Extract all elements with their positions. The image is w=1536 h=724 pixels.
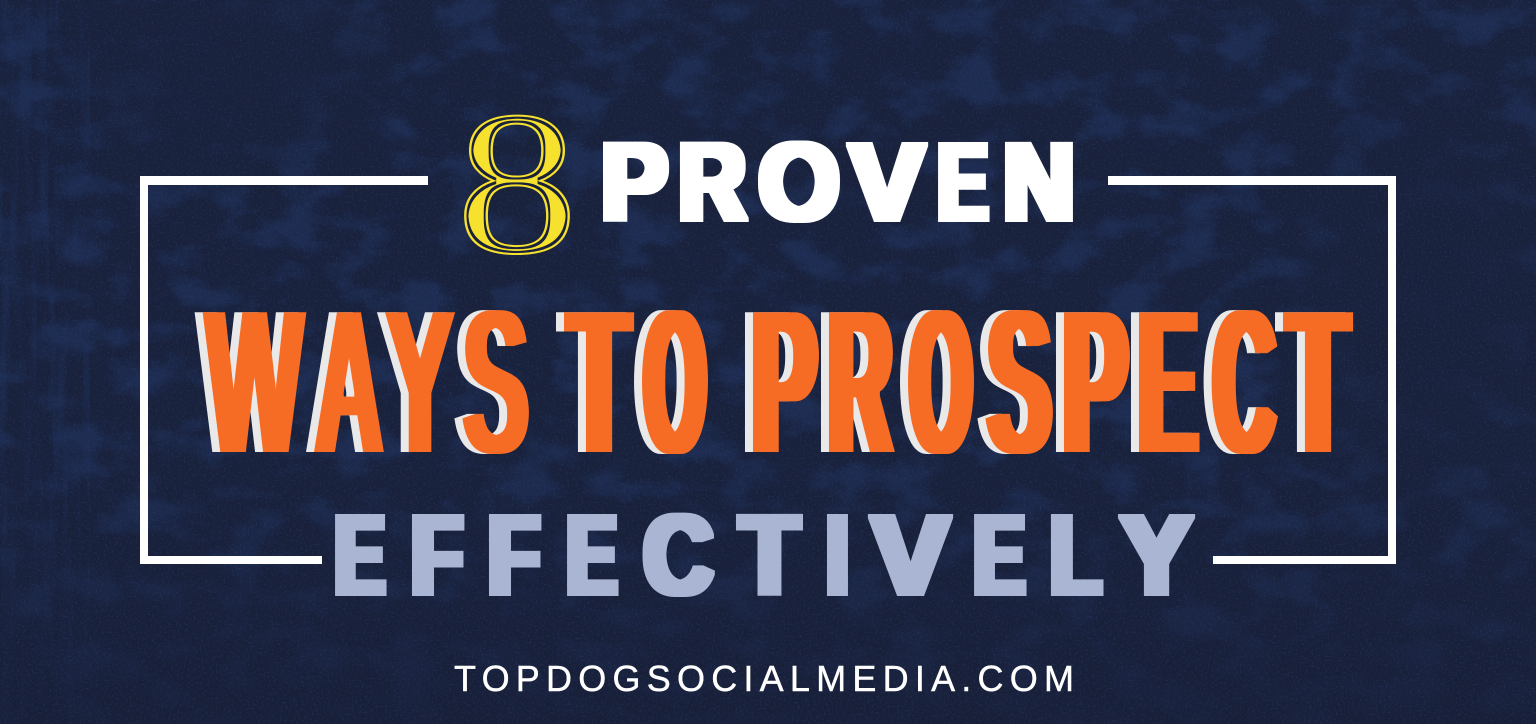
heading orange layer: Y xyxy=(386,266,454,499)
heading shadow layer: C xyxy=(1206,266,1267,499)
heading orange layer: W xyxy=(206,266,303,499)
heading shadow layer xyxy=(198,266,1340,499)
heading: PROVEN: R xyxy=(679,121,746,244)
heading: PROVEN: O xyxy=(759,121,839,244)
heading shadow layer: O xyxy=(637,266,697,499)
heading shadow layer: E xyxy=(1131,266,1189,499)
heading shadow layer: O xyxy=(903,266,963,499)
heading shadow layer: S xyxy=(980,266,1043,499)
heading: EFFECTIVELY: L xyxy=(1050,492,1101,618)
heading orange layer: O xyxy=(911,266,971,499)
heading: PROVEN: E xyxy=(938,121,987,244)
heading shadow layer: W xyxy=(198,266,295,499)
heading orange layer: C xyxy=(1214,266,1275,499)
heading: EFFECTIVELY xyxy=(335,492,1192,618)
heading: EFFECTIVELY: C xyxy=(644,492,712,618)
heading: EFFECTIVELY: T xyxy=(740,492,799,618)
heading: EFFECTIVELY: E xyxy=(567,492,616,618)
heading: WAYS TO PROSPECT xyxy=(198,266,1348,499)
heading shadow layer: Y xyxy=(378,266,446,499)
heading: WAYS TO PROSPECT: T xyxy=(1280,266,1340,499)
heading: PROVEN: V xyxy=(850,121,924,244)
heading shadow layer: P xyxy=(1056,266,1119,499)
heading: EFFECTIVELY: E xyxy=(974,492,1024,618)
heading orange layer: E xyxy=(1139,266,1197,499)
website URL: TOPDOGSOCIALMEDIA.COM xyxy=(454,658,1074,699)
heading shadow layer: A xyxy=(307,266,375,499)
heading orange layer: S xyxy=(463,266,529,499)
heading: PROVEN: N xyxy=(1003,121,1075,244)
heading: EFFECTIVELY: Y xyxy=(1121,492,1192,618)
heading shadow layer: S xyxy=(455,266,521,499)
numeral 8: 8 xyxy=(456,70,578,297)
heading orange layer: P xyxy=(1064,266,1127,499)
heading orange layer: P xyxy=(753,266,816,499)
heading: EFFECTIVELY: E xyxy=(335,492,384,618)
heading shadow layer: R xyxy=(821,266,884,499)
title frame xyxy=(140,176,1396,564)
heading orange layer xyxy=(206,266,1348,499)
heading: PROVEN: P xyxy=(601,121,668,244)
heading: EFFECTIVELY: V xyxy=(872,492,949,618)
text: T xyxy=(1288,266,1348,499)
heading orange layer: O xyxy=(645,266,705,499)
heading shadow layer: P xyxy=(745,266,808,499)
heading orange layer: R xyxy=(829,266,892,499)
heading shadow layer: T xyxy=(561,266,621,499)
heading orange layer: T xyxy=(569,266,629,499)
numeral 8: 8 xyxy=(456,70,578,297)
heading: EFFECTIVELY: F xyxy=(488,492,540,618)
heading orange layer: A xyxy=(315,266,383,499)
heading: EFFECTIVELY: F xyxy=(411,492,462,618)
heading: PROVEN xyxy=(601,121,1075,244)
heading orange layer: S xyxy=(988,266,1051,499)
heading: EFFECTIVELY: I xyxy=(827,492,848,618)
